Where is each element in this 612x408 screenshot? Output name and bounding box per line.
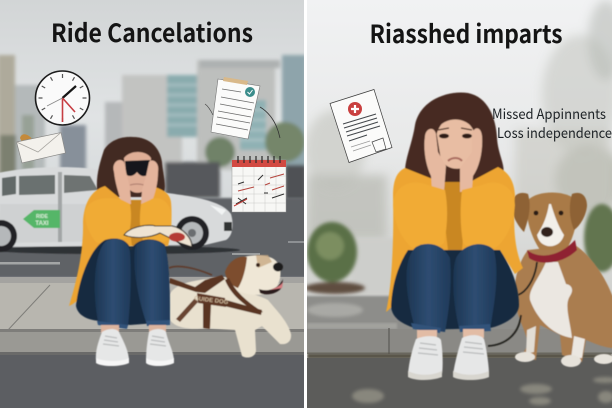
taxi car — [0, 167, 240, 254]
panel: real-world impacts — [303, 0, 612, 408]
city background — [0, 0, 304, 200]
dog ear — [225, 257, 247, 288]
taxi sign: TAXI — [35, 221, 49, 227]
panel: ride cancelations — [0, 0, 308, 408]
icon: calendar — [232, 156, 286, 212]
hair — [97, 137, 165, 197]
icon: medical document — [330, 90, 392, 162]
dog: guide dog lying — [168, 255, 291, 358]
curb — [307, 329, 612, 354]
dappled light — [352, 377, 612, 405]
person: worried woman — [386, 92, 523, 380]
hands — [424, 129, 446, 192]
title: Riasshed imparts: Riasshed imparts — [370, 15, 562, 51]
shoes — [96, 329, 129, 365]
leaf litter — [307, 353, 612, 359]
cardigan — [69, 186, 172, 306]
sidewalk — [0, 277, 304, 283]
dog: brown and white sitting — [488, 192, 612, 367]
held folded items — [124, 225, 192, 247]
jeans — [391, 250, 519, 330]
shoes — [408, 336, 443, 378]
person: woman with blindfold — [69, 137, 192, 366]
cardigan — [386, 167, 523, 312]
sleeves — [393, 182, 447, 250]
wheels — [175, 216, 209, 250]
taxi sign — [23, 210, 60, 228]
icon: clipboard checklist — [205, 77, 280, 139]
curb — [0, 331, 304, 353]
dog chest — [530, 262, 572, 338]
hands — [113, 160, 131, 204]
street — [0, 355, 304, 408]
red collar — [527, 240, 577, 263]
hair — [405, 92, 504, 184]
taxi sign: RIDE — [36, 214, 49, 220]
jeans — [76, 238, 170, 325]
face — [436, 120, 474, 169]
blindfold — [125, 160, 150, 176]
icon: wall clock — [36, 71, 90, 125]
street — [307, 358, 612, 408]
misty park background — [305, 0, 612, 300]
leash — [488, 262, 537, 346]
sidewalk — [307, 294, 550, 329]
sleeves — [120, 199, 132, 229]
guide dog harness: GUIDE DOG — [194, 296, 229, 306]
face — [124, 152, 151, 193]
bushes — [305, 204, 612, 294]
road — [0, 198, 308, 278]
title: Ride Cancelations: Ride Cancelations — [51, 14, 253, 50]
text: Missed Appinnents: Missed Appinnents — [492, 104, 606, 124]
icon: envelope — [16, 132, 66, 163]
